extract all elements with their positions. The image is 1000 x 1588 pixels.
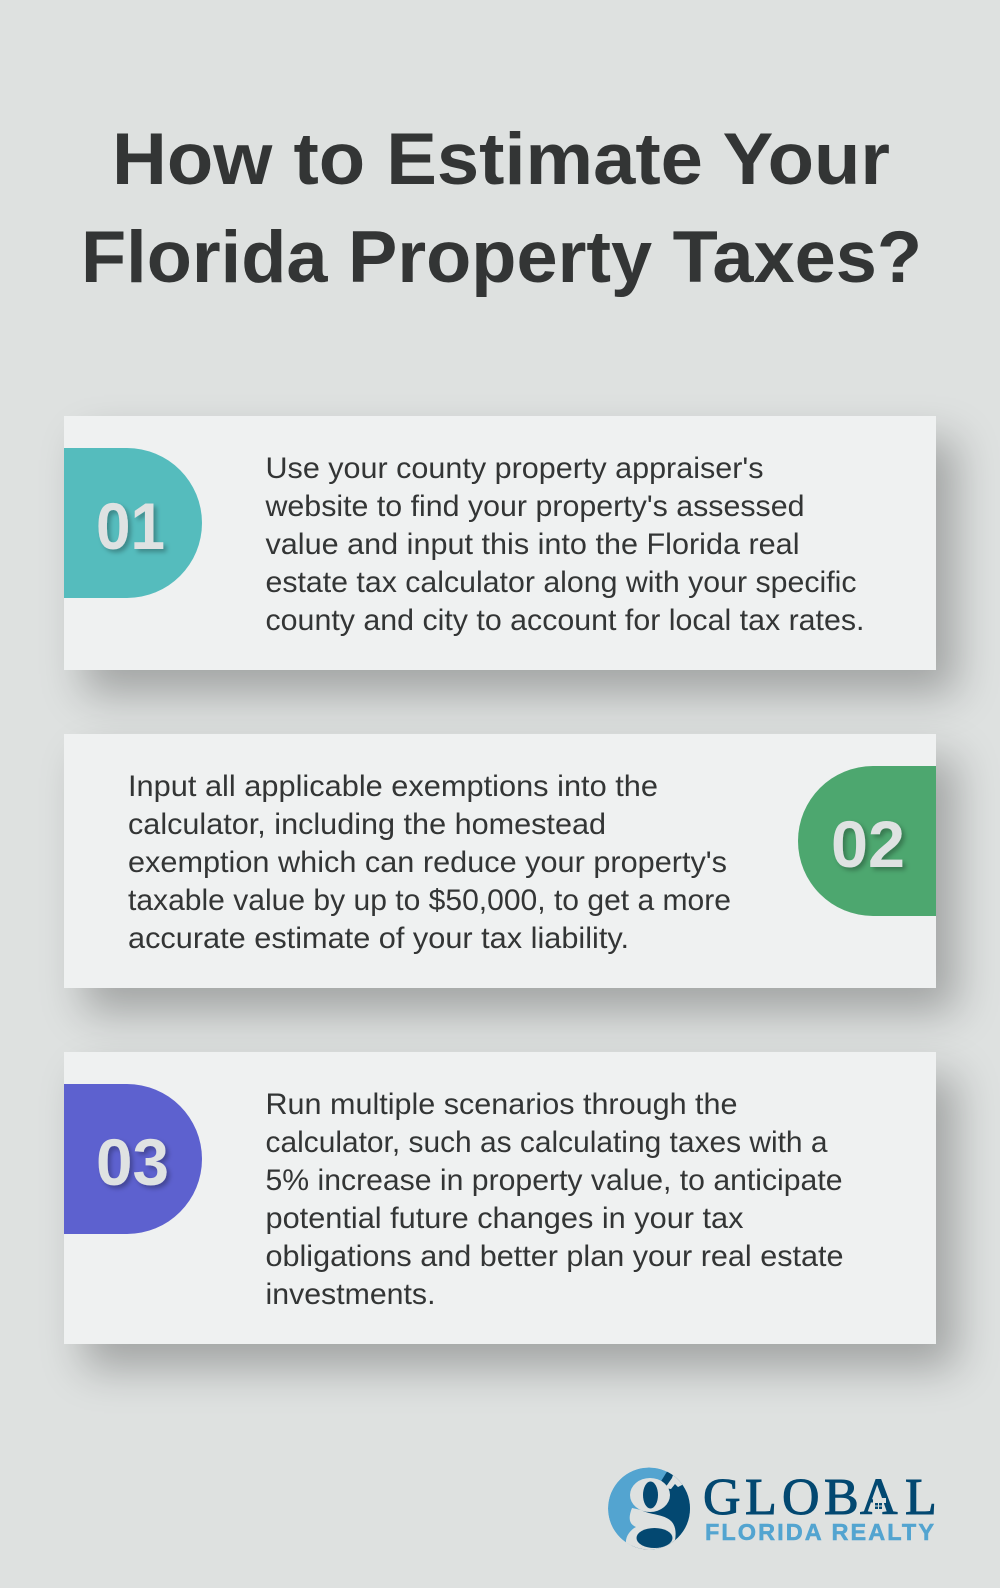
step 3 number: 03	[96, 1125, 169, 1199]
step 3 text: obligations and better plan your real estate	[266, 1240, 844, 1273]
panel: step 2 card	[64, 734, 936, 988]
step 3 text: Run multiple scenarios through the	[266, 1088, 738, 1121]
step 2 text: taxable value by up to $50,000, to get a more	[128, 884, 731, 917]
logo wordmark FLORIDA REALTY: FLORIDA REALTY	[705, 1519, 934, 1545]
step 2 text: exemption which can reduce your property's	[128, 846, 727, 879]
step 3 text: 5% increase in property value, to anticipate	[266, 1164, 842, 1197]
step 2 text: Input all applicable exemptions into the	[128, 770, 658, 803]
step 1 text	[264, 452, 864, 637]
step 1 number badge	[64, 448, 202, 598]
step 1 text: county and city to account for local tax rates.	[266, 604, 864, 637]
logo wordmark GLOBAL: GLOBAL	[703, 1469, 937, 1526]
step 1 number: 01	[96, 489, 165, 563]
logo: Global Florida Realty	[608, 1466, 937, 1552]
step 1 text: value and input this into the Florida real	[266, 528, 800, 561]
title: Florida Property Taxes?	[81, 217, 922, 298]
step 3 text	[266, 1088, 844, 1311]
step 1 text: estate tax calculator along with your specific	[266, 566, 856, 599]
step 3 text: calculator, such as calculating taxes with a	[266, 1126, 828, 1159]
step 1 text: website to find your property's assessed	[264, 490, 804, 523]
step 1 text: Use your county property appraiser's	[266, 452, 764, 485]
text and logo layer	[86, 131, 934, 1550]
panel: step 3 card	[64, 1052, 936, 1344]
step 3 text: potential future changes in your tax	[266, 1202, 744, 1235]
step 2 number badge	[798, 766, 936, 916]
step 3 number badge	[64, 1084, 202, 1234]
step 2 number: 02	[831, 807, 905, 881]
step 3 text: investments.	[266, 1278, 436, 1311]
logo house window in the letter A	[873, 1498, 886, 1509]
step 2 text	[128, 770, 731, 955]
logo icon: g in circle	[608, 1468, 690, 1550]
title: How to Estimate Your	[112, 119, 890, 200]
step 2 text: calculator, including the homestead	[128, 808, 606, 841]
step 2 text: accurate estimate of your tax liability.	[128, 922, 629, 955]
title	[81, 119, 922, 298]
panel: step 1 card	[64, 416, 936, 670]
